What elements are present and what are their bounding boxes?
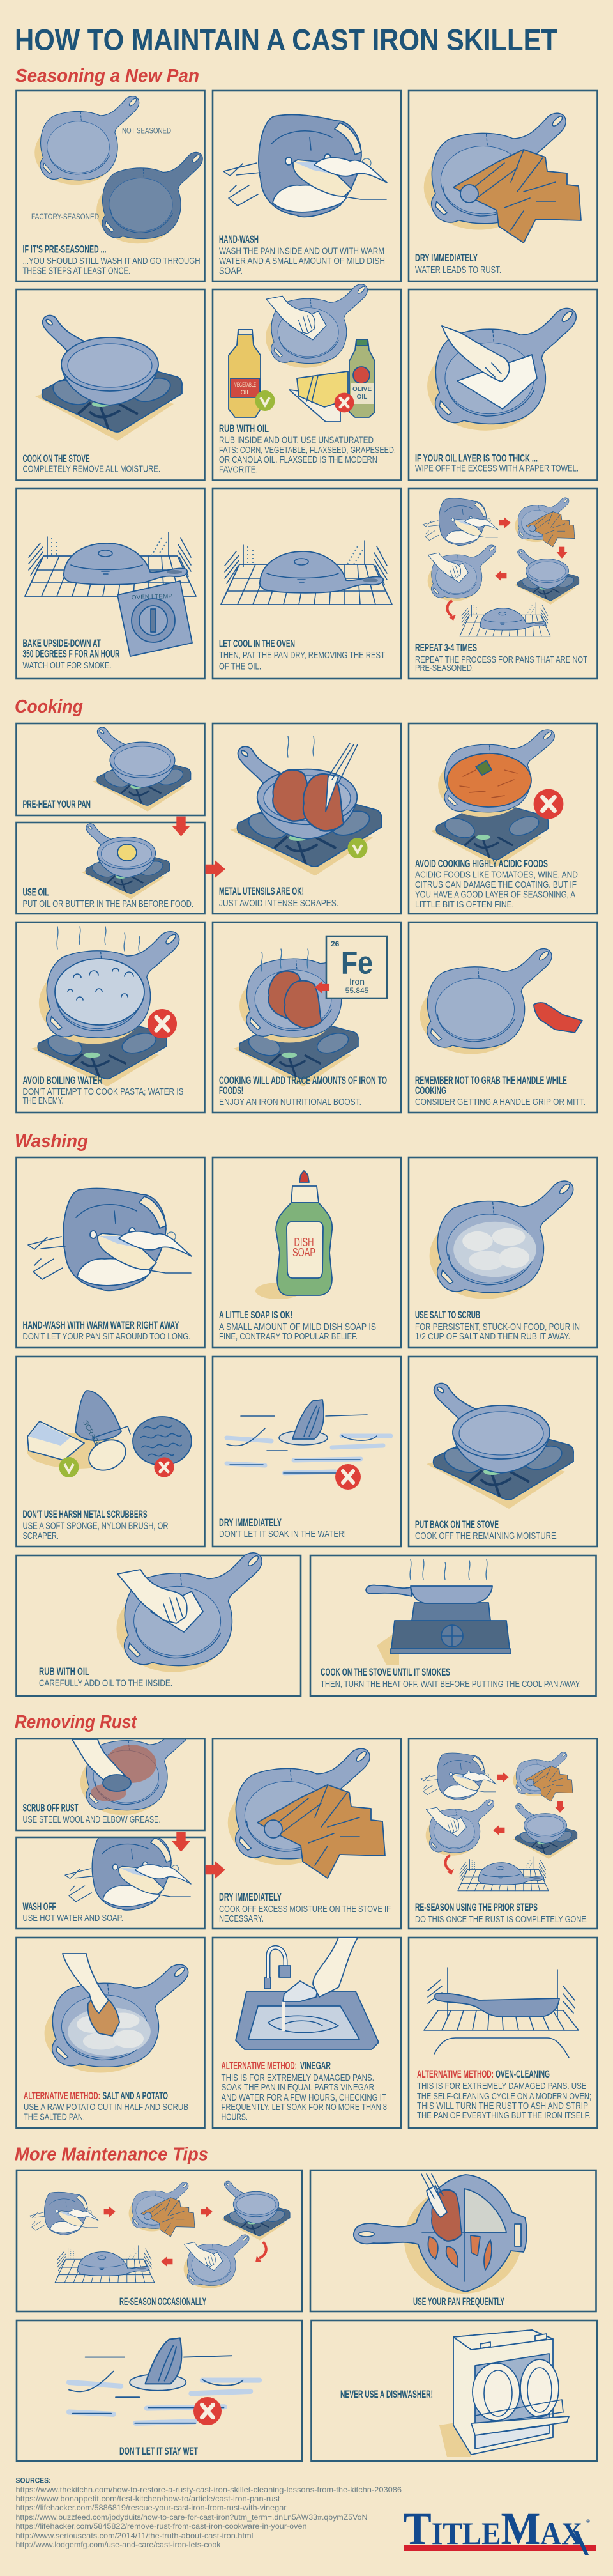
text: acidic: ACIDIC FOODS LIKE TOMATOES, WINE, AND	[415, 870, 578, 881]
panel: metal utensils	[213, 723, 401, 914]
text: oven-cleaning: OVEN-CLEANING	[496, 2069, 550, 2080]
icon: butter in pan on stove	[82, 824, 170, 899]
text: repeat	[415, 642, 587, 674]
text: acidic: LITTLE BIT IS OFTEN FINE.	[415, 900, 514, 910]
icon: scrubbing rusty pan	[72, 1739, 186, 1815]
icon: x mark	[154, 1457, 174, 1477]
text: use frequently: USE YOUR PAN FREQUENTLY	[413, 2296, 504, 2308]
panel: use oil	[17, 822, 204, 914]
panel: rub with oil wide	[17, 1553, 301, 1696]
text: potato: USE A RAW POTATO CUT IN HALF AND SCRUB	[24, 2102, 188, 2113]
arrow: right	[206, 1861, 225, 1879]
icon: check mark	[59, 1457, 79, 1477]
text: scrubbers: DON'T USE HARSH METAL SCRUBBERS	[23, 1509, 147, 1520]
text: cook on the stove: COOK ON THE STOVE	[23, 453, 89, 465]
text: pre-seasoned: IF IT'S PRE-SEASONED ...	[23, 244, 106, 256]
text: acidic	[415, 858, 578, 910]
text: rub with oil: RUB WITH OIL	[219, 423, 269, 435]
icon: boiling water in pan	[31, 927, 179, 1086]
panel: salt and a potato	[17, 1938, 204, 2128]
text: rub: CAREFULLY ADD OIL TO THE INSIDE.	[39, 1679, 172, 1689]
panel: don't let it stay wet	[17, 2320, 302, 2461]
text: oil layer	[415, 452, 579, 474]
text: let cool: THEN, PAT THE PAN DRY, REMOVING THE REST	[219, 651, 385, 661]
text: pre-seasoned: ...YOU SHOULD STILL WASH IT AND GO THROUGH	[23, 256, 201, 266]
label: not seasoned: NOT SEASONED	[122, 128, 171, 135]
text: dishwasher: NEVER USE A DISHWASHER!	[340, 2389, 433, 2400]
panel: avoid acidic foods	[409, 723, 598, 914]
text: rub with oil: FAVORITE.	[219, 465, 258, 475]
icon: washing rusty pan	[65, 1832, 191, 1910]
icon: pan of mixed food	[354, 2174, 527, 2294]
icon: factory-seasoned skillet	[96, 152, 202, 243]
text: dry immediately: WATER LEADS TO RUST.	[415, 265, 501, 275]
icon: iron periodic table card: Iron	[349, 976, 365, 987]
text: scrubbers: USE A SOFT SPONGE, NYLON BRUSH, OR	[23, 1521, 169, 1531]
text: hand-wash: DON'T LET YOUR PAN SIT AROUND TOO LONG.	[23, 1332, 190, 1342]
text: oven-cleaning: ALTERNATIVE METHOD:	[417, 2069, 494, 2080]
text: scrub: USE STEEL WOOL AND ELBOW GREASE.	[23, 1815, 161, 1825]
icon: check mark	[255, 390, 275, 411]
sources: SOURCES:	[15, 2476, 51, 2485]
sources: http://www.lodgemfg.com/use-and-care/cast-iron-lets-cook	[15, 2540, 222, 2549]
text: dry	[219, 1892, 391, 1924]
text: iron: FOODS!	[219, 1085, 243, 1097]
panel: dry immediately	[213, 1357, 401, 1546]
icon: x mark	[193, 2397, 222, 2425]
icon: pan on stove side view	[366, 1559, 510, 1665]
icon: x mark	[335, 1464, 361, 1490]
icon: pan with salt	[430, 1181, 573, 1299]
text: wet: DON'T LET IT STAY WET	[119, 2446, 198, 2457]
panel: use your pan frequently	[310, 2170, 596, 2311]
panel: wash off	[17, 1832, 204, 1929]
text: vinegar: VINEGAR	[300, 2060, 331, 2072]
text: rub: RUB WITH OIL	[39, 1666, 89, 1677]
text: boiling	[23, 1075, 184, 1106]
text: dry	[219, 1517, 346, 1539]
panel: back on the stove	[409, 1357, 598, 1546]
text: pre-heat: PRE-HEAT YOUR PAN	[23, 799, 91, 810]
text: use oil	[23, 886, 193, 909]
panel: cook until it smokes	[310, 1555, 596, 1696]
text: repeat: REPEAT 3-4 TIMES	[415, 642, 477, 654]
text: scrubbers	[23, 1509, 169, 1541]
icon: iron periodic table card: Fe	[341, 945, 373, 981]
text: potato: ALTERNATIVE METHOD:	[24, 2090, 100, 2102]
panel: re-season occasionally	[17, 2170, 302, 2311]
text: soap: A LITTLE SOAP IS OK!	[219, 1309, 292, 1321]
panel: never use a dishwasher	[312, 2320, 597, 2461]
panel: dry immediately rust	[213, 1739, 401, 1929]
text: acidic: CITRUS CAN DAMAGE THE COATING. BUT IF	[415, 880, 577, 890]
arrow: down	[172, 1832, 190, 1852]
text: wash off: USE HOT WATER AND SOAP.	[23, 1913, 123, 1924]
text: stove	[415, 1519, 558, 1541]
icon: washing pan	[28, 1189, 192, 1290]
text: acidic: YOU HAVE A GOOD LAYER OF SEASONING, A	[415, 890, 575, 900]
icon: iron periodic table card: 26	[331, 939, 340, 948]
text: handle: COOKING	[415, 1085, 446, 1097]
sources: https://lifehacker.com/5886819/rescue-your-cast-iron-from-rust-with-vinegar	[15, 2503, 287, 2512]
sources: https://www.buzzfeed.com/jodyduits/how-to-care-for-cast-iron?utm_term=.dnLn5AW33#.qbymZ5VoN	[15, 2513, 368, 2522]
text: soap	[219, 1309, 376, 1342]
icon: dish soap bottle: DISH	[294, 1236, 314, 1249]
panel: a little soap	[213, 1157, 401, 1348]
text: dry: DON'T LET IT SOAK IN THE WATER!	[219, 1529, 346, 1539]
icon: towel drying pan	[228, 1748, 385, 1878]
icon: dishwasher	[439, 2330, 569, 2457]
icon: vegetable oil bottle	[229, 330, 261, 417]
text: oil layer: IF YOUR OIL LAYER IS TOO THICK ...	[415, 452, 538, 464]
text: pre-seasoned: THESE STEPS AT LEAST ONCE.	[23, 266, 130, 277]
panel: oven-cleaning	[409, 1938, 598, 2128]
icon: rubbing pan	[266, 284, 367, 368]
logo: TitleMax: TITLEMAX	[404, 2503, 582, 2554]
text: hand-wash	[23, 1320, 190, 1342]
text: hand-wash: HAND-WASH	[219, 234, 259, 245]
icon: washing pan	[223, 115, 387, 217]
icon: not seasoned skillet	[34, 96, 139, 185]
text: wash off: WASH OFF	[23, 1901, 56, 1913]
icon: pan on stove	[427, 1384, 573, 1509]
panel: no harsh scrubbers	[17, 1357, 204, 1546]
sources: https://www.bonappetit.com/test-kitchen/how-to/article/cast-iron-pan-rust	[15, 2494, 280, 2503]
title: HOW TO MAINTAIN A CAST IRON SKILLET	[15, 23, 557, 57]
icon: pan and mitt	[420, 949, 582, 1054]
text: bake: WATCH OUT FOR SMOKE.	[23, 661, 111, 671]
text: metal utensils: JUST AVOID INTENSE SCRAPES.	[219, 899, 338, 909]
icon: maintenance cycle	[29, 2181, 290, 2288]
icon: iron periodic table card: 55.845	[345, 986, 369, 995]
text: iron	[219, 1075, 387, 1107]
icon: oven temperature dial	[117, 581, 192, 656]
icon: wiping with paper towel	[427, 308, 576, 431]
heading: more maintenance tips: More Maintenance Tips	[15, 2145, 208, 2165]
panel: use salt to scrub	[409, 1157, 598, 1348]
text: iron: ENJOY AN IRON NUTRITIONAL BOOST.	[219, 1097, 361, 1107]
icon: butter	[289, 371, 348, 422]
text: hand-wash: WATER AND A SMALL AMOUNT OF MILD DISH	[219, 256, 385, 266]
text: stove: PUT BACK ON THE STOVE	[415, 1519, 499, 1531]
icon: x mark	[335, 393, 354, 412]
icon: sink with vinegar	[236, 1938, 379, 2049]
text: cook on the stove	[23, 453, 160, 475]
arrow: iron to food	[315, 981, 329, 994]
icon: handle in water	[227, 1400, 391, 1473]
text: stove: COOK OFF THE REMAINING MOISTURE.	[415, 1531, 558, 1541]
panel: hand-wash	[213, 91, 401, 281]
panel: rub with oil	[213, 284, 401, 481]
arrow: down	[172, 817, 190, 837]
heading: removing rust: Removing Rust	[15, 1712, 137, 1732]
icon: olive oil bottle: OIL	[357, 394, 367, 401]
icon: pan in oven	[25, 532, 196, 596]
panel: let cool in the oven	[213, 488, 401, 679]
text: re-season	[415, 1902, 588, 1925]
text: salt: 1/2 CUP OF SALT AND THEN RUB IT AWAY.	[415, 1332, 570, 1342]
text: wash off	[23, 1901, 123, 1924]
text: vinegar: THIS IS FOR EXTREMELY DAMAGED PANS.	[221, 2073, 374, 2083]
icon: vegetable oil bottle: OIL	[241, 389, 250, 396]
text: let cool: LET COOL IN THE OVEN	[219, 638, 295, 649]
icon: iron periodic table card	[326, 936, 387, 998]
label: factory-seasoned: FACTORY-SEASONED	[31, 213, 99, 221]
text: hand-wash: WASH THE PAN INSIDE AND OUT WITH WARM	[219, 247, 384, 257]
text: dry immediately	[415, 252, 501, 275]
icon: scraper, sponge and brush	[27, 1391, 130, 1476]
text: repeat: PRE-SEASONED.	[415, 663, 474, 674]
panel: re-season	[409, 1739, 598, 1929]
text: oven-cleaning	[417, 2069, 591, 2121]
icon: check mark	[347, 838, 368, 858]
icon: dish soap bottle: SOAP	[292, 1246, 315, 1259]
arrow: right	[206, 860, 225, 878]
text: potato: THE SALTED PAN.	[24, 2113, 85, 2123]
text: dry: DRY IMMEDIATELY	[219, 1892, 282, 1903]
icon: handle in water	[69, 2338, 259, 2423]
text: soap: FINE, CONTRARY TO POPULAR BELIEF.	[219, 1332, 358, 1342]
panel: avoid boiling water	[17, 922, 204, 1113]
panel: vinegar	[213, 1938, 401, 2128]
text: dry: NECESSARY.	[219, 1914, 264, 1924]
text: scrub: SCRUB OFF RUST	[23, 1803, 78, 1814]
text: vinegar: AND WATER FOR A FEW HOURS, CHECKING IT	[221, 2093, 386, 2103]
text: use oil: USE OIL	[23, 886, 49, 898]
icon: pan cooling in oven	[221, 541, 392, 605]
panel: hand-wash right away	[17, 1157, 204, 1348]
icon: towel drying pan	[424, 113, 581, 243]
text: rub with oil: OR CANOLA OIL. FLAXSEED IS THE MODERN	[219, 455, 377, 465]
icon: olive oil bottle: OLIVE	[352, 386, 372, 393]
sources	[15, 2476, 402, 2549]
panel: trace iron	[213, 922, 401, 1113]
text: hand-wash	[219, 234, 385, 277]
text: dry immediately: DRY IMMEDIATELY	[415, 252, 478, 264]
panel: dry immediately	[409, 91, 598, 281]
panel: pre-heat your pan	[17, 723, 204, 815]
heading: seasoning a new pan: Seasoning a New Pan	[15, 66, 199, 86]
panel: scrub off rust	[15, 1738, 206, 1832]
text: smokes	[321, 1667, 581, 1690]
text: scrubbers: SCRAPER.	[23, 1531, 59, 1541]
text: boiling: THE ENEMY.	[23, 1096, 64, 1106]
sources: http://www.seriouseats.com/2014/11/the-truth-about-cast-iron.html	[15, 2531, 253, 2540]
icon: scraper, sponge and brush: SCRAPER	[81, 1419, 104, 1453]
text: boiling: AVOID BOILING WATER	[23, 1075, 103, 1086]
text: hand-wash: SOAP.	[219, 266, 243, 277]
text: cook on the stove: COMPLETELY REMOVE ALL MOISTURE.	[23, 465, 160, 475]
text: boiling: DON'T ATTEMPT TO COOK PASTA; WATER IS	[23, 1087, 184, 1097]
text: re-season occasionally: RE-SEASON OCCASIONALLY	[119, 2296, 206, 2308]
icon: pan on stove	[35, 316, 182, 441]
icon: dish soap bottle	[255, 1171, 332, 1299]
text: salt	[415, 1309, 580, 1342]
heading: cooking: Cooking	[15, 697, 83, 717]
text: vinegar: SOAK THE PAN IN EQUAL PARTS VINEGAR	[221, 2083, 374, 2093]
text: potato: SALT AND A POTATO	[102, 2090, 168, 2102]
text: rub with oil	[219, 423, 396, 475]
text: metal utensils	[219, 886, 338, 909]
icon: tomato sauce in pan	[430, 730, 554, 867]
icon: potato scrubbing salted pan	[45, 1954, 188, 2073]
text: dry: DRY IMMEDIATELY	[219, 1517, 282, 1529]
text: use oil: PUT OIL OR BUTTER IN THE PAN BEFORE FOOD.	[23, 899, 193, 909]
text: rub	[39, 1666, 172, 1689]
panel: oil layer too thick	[409, 289, 598, 481]
icon: meat in pan on stove	[234, 941, 368, 1086]
panel: cook on the stove	[17, 289, 204, 481]
icon: steel wool	[133, 1417, 192, 1465]
text: vinegar: HOURS.	[221, 2113, 248, 2123]
panel: repeat 3-4 times	[409, 488, 598, 679]
text: soap: A SMALL AMOUNT OF MILD DISH SOAP IS	[219, 1322, 376, 1332]
icon: olive oil bottle	[349, 339, 375, 417]
text: vinegar: FREQUENTLY. LET SOAK FOR NO MORE THAN 8	[221, 2102, 387, 2113]
icon: rubbing oil in pan	[116, 1553, 262, 1672]
text: scrub	[23, 1803, 161, 1825]
text: re-season: RE-SEASON USING THE PRIOR STEPS	[415, 1902, 538, 1913]
text: rub with oil: RUB INSIDE AND OUT. USE UNSATURATED	[219, 436, 374, 446]
text: bake	[23, 638, 120, 671]
icon: pan in self-cleaning oven	[424, 1968, 579, 2058]
icon: x mark	[534, 789, 563, 819]
panel: bake upside-down	[17, 488, 204, 679]
text: iron: COOKING WILL ADD TRACE AMOUNTS OF IRON TO	[219, 1075, 387, 1086]
icon: seasoning cycle	[421, 1752, 577, 1891]
icon: frying meat with utensils	[230, 736, 382, 876]
text: potato	[24, 2090, 188, 2123]
icon: x mark	[148, 1009, 177, 1038]
text: rub with oil: FATS: CORN, VEGETABLE, FLAXSEED, GRAPESEED,	[219, 445, 396, 456]
text: vinegar: ALTERNATIVE METHOD:	[221, 2060, 297, 2072]
panel: if it's pre-seasoned	[17, 91, 204, 281]
sources: https://www.thekitchn.com/how-to-restore-a-rusty-cast-iron-skillet-cleaning-lessons-from-the-kitchn-203086	[15, 2485, 402, 2494]
text: dry: COOK OFF EXCESS MOISTURE ON THE STOVE IF	[219, 1904, 391, 1915]
text: vinegar	[221, 2060, 387, 2123]
text: pre-seasoned	[23, 244, 201, 277]
heading: washing: Washing	[15, 1131, 88, 1152]
sources: https://lifehacker.com/5845822/remove-rust-from-cast-iron-cookware-in-your-oven	[15, 2522, 306, 2531]
text: handle	[415, 1075, 586, 1107]
text: bake: 350 DEGREES F FOR AN HOUR	[23, 649, 120, 660]
text: let cool	[219, 638, 385, 672]
icon: pan on stove	[93, 727, 191, 812]
logo: TitleMax: ®	[586, 2518, 590, 2524]
text: let cool: OF THE OIL.	[219, 662, 261, 672]
icon: vegetable oil bottle: VEGETABLE	[234, 382, 256, 388]
panel: handle warning	[409, 922, 598, 1113]
text: metal utensils: METAL UTENSILS ARE OK!	[219, 886, 304, 897]
icon: seasoning cycle	[423, 498, 579, 636]
icon: oven temperature dial: OVEN I TEMP	[132, 593, 173, 601]
text: bake: BAKE UPSIDE-DOWN AT	[23, 638, 101, 649]
text: smokes: COOK ON THE STOVE UNTIL IT SMOKES	[321, 1667, 450, 1678]
text: salt: USE SALT TO SCRUB	[415, 1309, 480, 1321]
text: hand-wash: HAND-WASH WITH WARM WATER RIGHT AWAY	[23, 1320, 179, 1331]
